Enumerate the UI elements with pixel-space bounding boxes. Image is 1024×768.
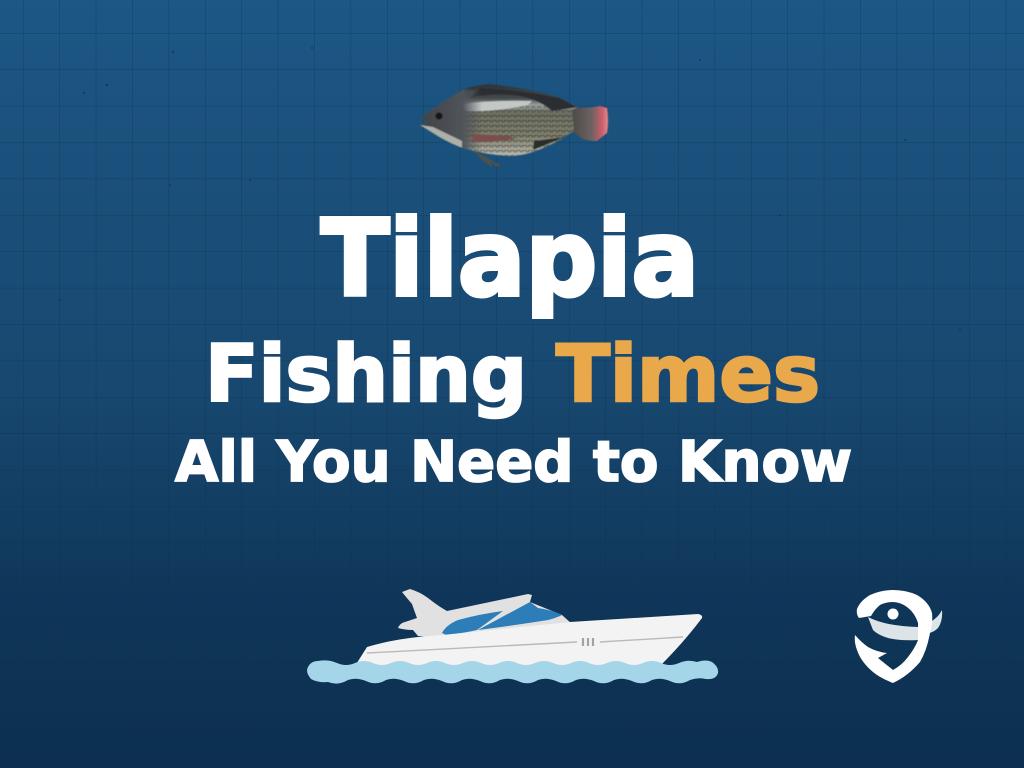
- pelvic fin: [473, 150, 506, 168]
- logo body: [855, 590, 932, 683]
- logo eye: [888, 608, 898, 620]
- icon: boat on water: [307, 589, 718, 684]
- title: Tilapia: Tilapia: [321, 198, 699, 320]
- heading: Fishing Times: [205, 330, 820, 420]
- hull stripe and vents: [367, 637, 683, 653]
- scale texture: [416, 88, 578, 156]
- anal fin: [533, 137, 565, 150]
- dorsal dark back: [470, 88, 578, 111]
- logo band: [868, 610, 942, 640]
- eye: [436, 112, 442, 120]
- head: [416, 90, 482, 150]
- boat superstructure: [398, 589, 572, 638]
- water waves: [307, 660, 718, 684]
- heading word: Fishing: Fishing: [205, 330, 527, 420]
- throat highlight: [420, 125, 462, 150]
- icon: fish logo: [855, 590, 942, 683]
- boat windows: [442, 602, 562, 635]
- heading word: Times: Times: [556, 330, 820, 420]
- body: [420, 84, 578, 156]
- tail fin: [572, 106, 608, 141]
- boat hull: [355, 614, 702, 666]
- pectoral fin: [472, 134, 516, 142]
- subtitle: All You Need to Know: [175, 430, 852, 495]
- icon: tilapia fish: [416, 84, 608, 168]
- silver highlight: [462, 101, 532, 111]
